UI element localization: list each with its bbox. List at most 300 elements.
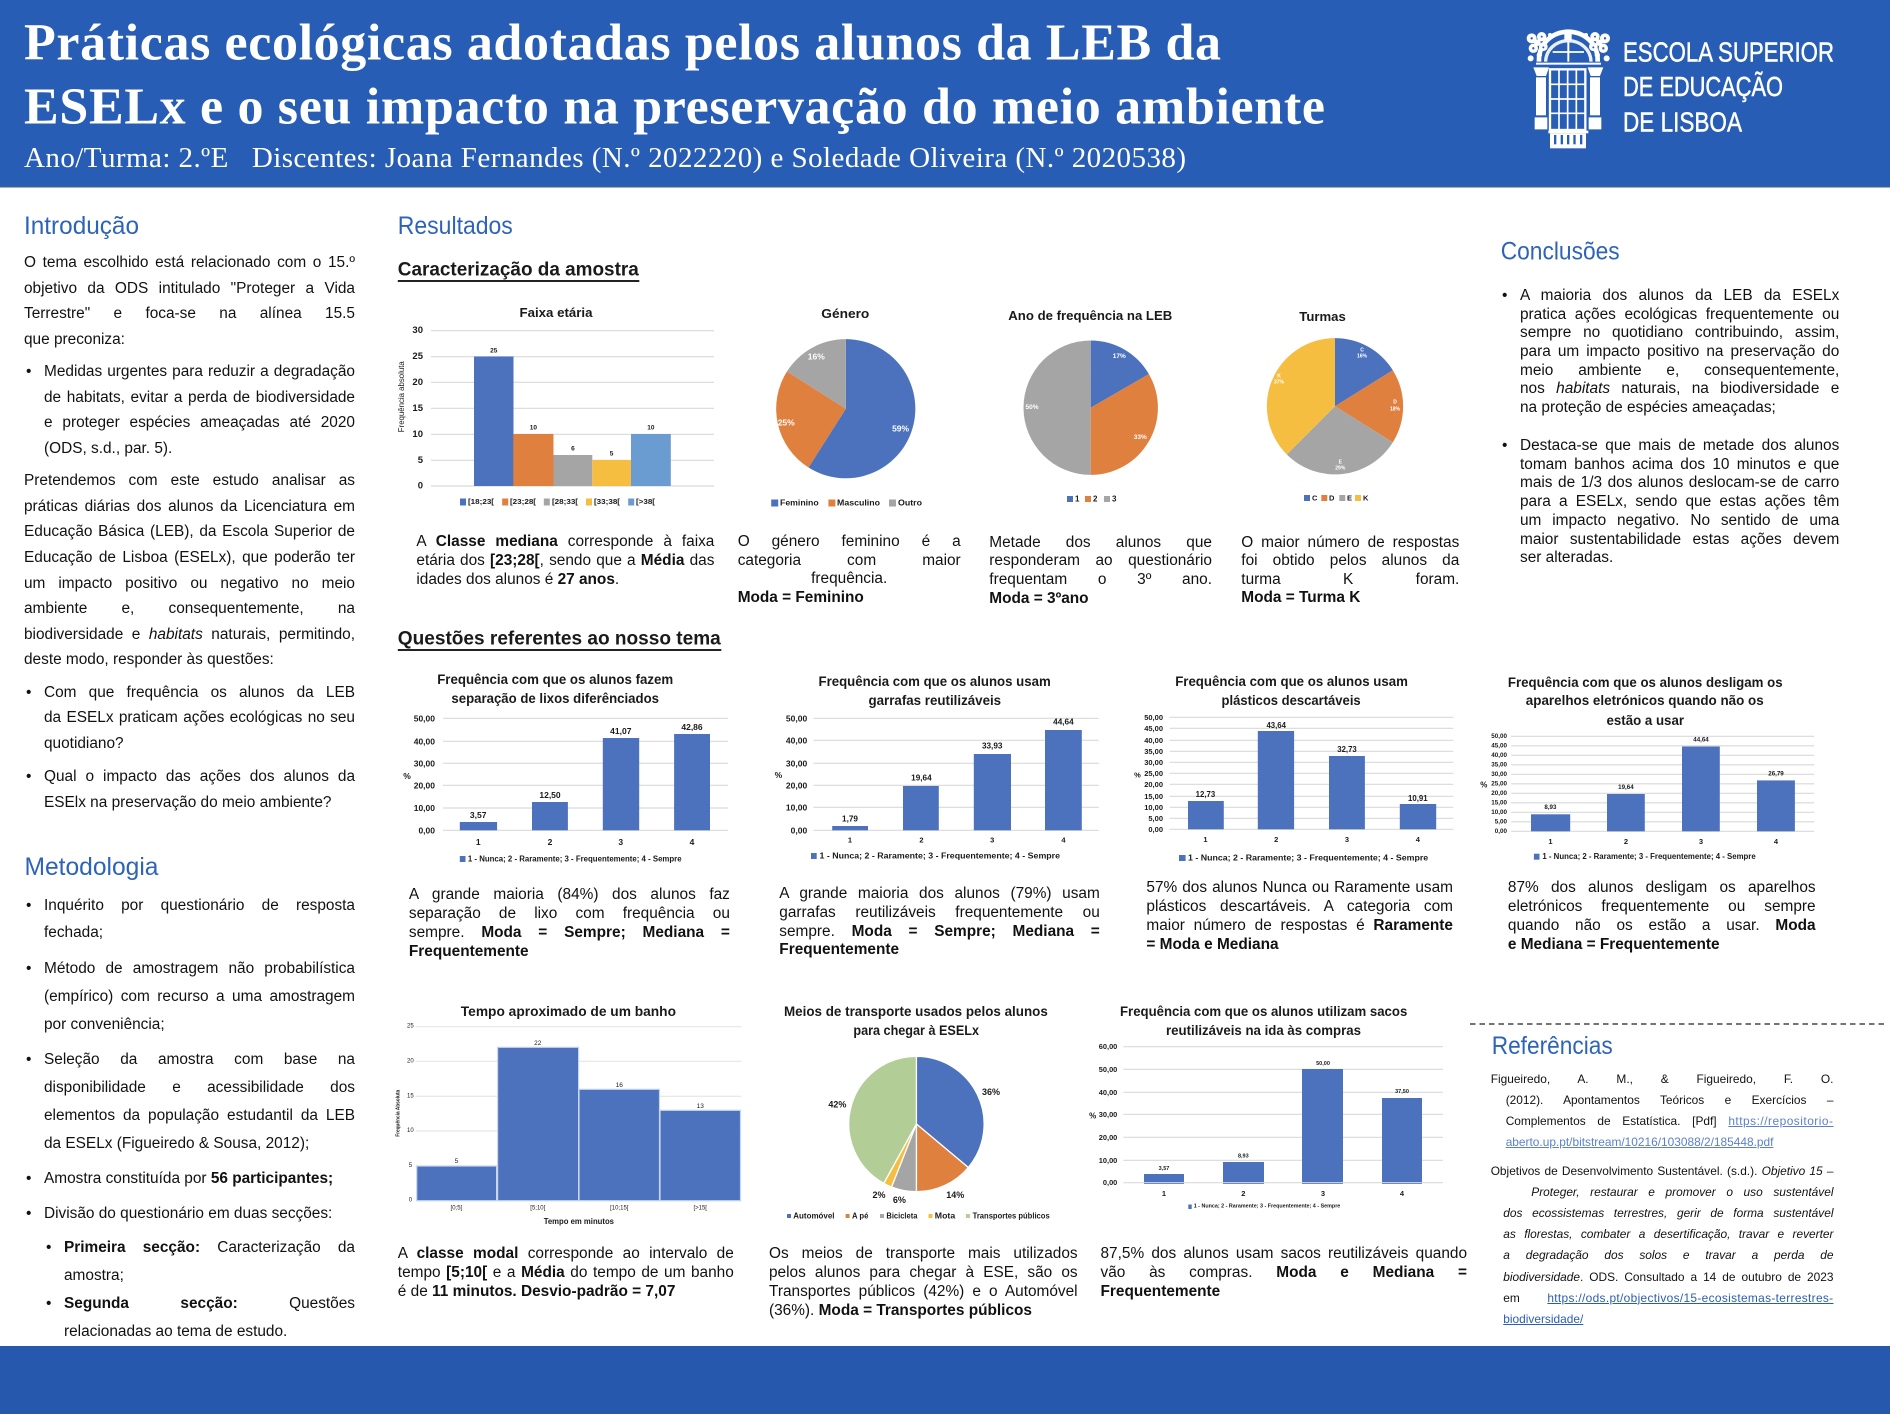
value labels	[1196, 721, 1428, 803]
y axis labels: 10,00	[414, 803, 435, 813]
y axis labels: 20	[412, 377, 423, 388]
text: conclusão 1: na proteção de espécies ameaçadas;	[1520, 399, 1776, 416]
text: metodologia bullet 3: disponibilidade e acessibilidade dos	[44, 1079, 355, 1096]
category labels: [0;5[	[451, 1206, 463, 1212]
text: conclusão 1: pratica ações ecológicas frequentemente ou	[1520, 306, 1839, 322]
y axis labels: 0,00	[791, 825, 807, 835]
y axis labels: 5	[409, 1163, 413, 1169]
text: segunda secção: relacionadas ao tema de estudo.	[64, 1323, 287, 1340]
y axis labels: 0,00	[418, 825, 435, 835]
caption: banho: A classe modal corresponde ao intervalo de	[398, 1245, 734, 1262]
category labels: 3	[618, 837, 623, 847]
legend: 1	[1075, 494, 1080, 504]
text: introdução paragraph 2: ambiente e, consequentemente, na	[24, 600, 355, 617]
caption: aparelhos: eletrónicos frequentemente ou sempre	[1508, 898, 1816, 915]
y axis labels: 0,00	[1495, 828, 1507, 835]
pie: 29%	[1335, 465, 1346, 471]
value labels	[490, 348, 655, 458]
text: metodologia bullet 3	[26, 1051, 355, 1152]
y axis labels: 5,00	[1148, 814, 1163, 823]
caption: Ano de frequência: responderam ao questionário	[989, 552, 1212, 569]
value labels: 44,64	[1053, 718, 1074, 726]
category labels	[1203, 835, 1421, 844]
heading: Metodologia: Metodologia	[24, 853, 159, 881]
y axis labels: 30,00	[1491, 771, 1507, 778]
subheading: Caracterização da amostra: Caracterização da amostra	[398, 260, 639, 280]
text: introdução paragraph 2: Educação Básica (LEB), da Escola Superior de	[24, 523, 355, 540]
chart title: Frequência com que os alunos utilizam sacos	[1120, 1004, 1407, 1019]
category labels: 4	[1416, 835, 1421, 844]
pie: C	[1360, 347, 1364, 353]
text: questão 1	[26, 684, 355, 752]
category labels: 1	[476, 837, 481, 847]
caption: aparelhos: e Mediana = Frequentemente	[1508, 936, 1720, 953]
text: metodologia bullet 1	[26, 896, 355, 941]
legend: Masculino	[837, 498, 880, 508]
text: conclusão 2: mais de 1/3 dos alunos deslocam-se de carro	[1520, 474, 1839, 491]
text: introdução paragraph 2: deste modo, responder às questões:	[24, 651, 274, 668]
legend: E	[1347, 494, 1352, 502]
legend: 3	[1112, 494, 1117, 504]
caption: garrafas: Frequentemente	[779, 941, 899, 958]
legend	[1067, 494, 1117, 504]
category labels: 2	[1241, 1189, 1245, 1198]
y axis title: Frequência absoluta	[396, 361, 406, 432]
value labels: 44,64	[1693, 736, 1709, 744]
y axis labels: 35,00	[1491, 761, 1507, 768]
text: conclusão 1: nos habitats naturais, na biodiversidade e	[1520, 380, 1839, 397]
category labels	[1162, 1189, 1405, 1198]
bars	[417, 1047, 740, 1201]
text: segunda secção	[46, 1295, 355, 1340]
y axis labels: 30,00	[1099, 1110, 1117, 1119]
heading: Referências: Referências	[1492, 1032, 1613, 1060]
reference: ODS	[1491, 1164, 1834, 1326]
text: introdução paragraph 1: Terrestre" e foca-se na alínea 15.5	[24, 305, 355, 322]
text: introdução paragraph 2: um impacto positivo ou negativo no meio	[24, 575, 355, 592]
chart title: plásticos descartáveis	[1222, 693, 1361, 708]
y axis labels: 50,00	[1099, 1065, 1117, 1074]
y axis labels	[1089, 1042, 1117, 1187]
category labels	[476, 837, 695, 847]
chart: separação de lixos	[403, 672, 728, 864]
reference: Figueiredo: Complementos de Estatística. [Pdf] https://repositorio-	[1506, 1114, 1833, 1128]
y axis labels	[407, 1024, 414, 1204]
caption: transporte: pelos alunos para chegar à ESE, são os	[769, 1264, 1078, 1281]
subtitle: Ano/Turma: 2.ºE Discentes: Joana Fernandes (N.º 2022220) e Soledade Oliveira (N.º 2020538)	[24, 142, 1186, 174]
icon: school logo window	[1527, 29, 1610, 148]
legend: [>38[	[636, 499, 656, 506]
legend: C	[1312, 494, 1318, 502]
y axis labels: 25	[412, 351, 424, 362]
value labels: 19,64	[1618, 784, 1634, 791]
chart: Tempo aproximado de um banho	[396, 1004, 741, 1226]
category labels: 4	[1061, 836, 1066, 844]
y axis labels: 60,00	[1099, 1042, 1117, 1051]
text: metodologia bullet 1: Inquérito por questionário de resposta	[44, 896, 355, 914]
caption: plásticos: plásticos descartáveis. A categoria com	[1146, 898, 1453, 915]
legend: 1 - Nunca; 2 - Raramente; 3 - Frequentemente; 4 - Sempre	[468, 854, 682, 864]
text: primeira secção: Primeira secção: Caracterização da	[64, 1239, 355, 1256]
value labels: 10,91	[1408, 794, 1428, 803]
value labels	[455, 1040, 704, 1165]
category labels: 4	[1774, 837, 1779, 846]
caption: Ano de frequência: Metade dos alunos que	[989, 534, 1212, 550]
logo wordmark	[1623, 37, 1834, 138]
heading: Conclusões: Conclusões	[1501, 238, 1620, 266]
value labels: 1,79	[842, 814, 858, 824]
legend: Automóvel	[793, 1212, 834, 1220]
y axis labels: 25	[407, 1024, 414, 1030]
text: introdução bullet meta 15.5: e proteger espécies ameaçadas até 2020	[44, 414, 355, 431]
caption: plásticos: 57% dos alunos Nunca ou Raramente usam	[1146, 879, 1453, 896]
text: questão 2: ESElx na preservação do meio ambiente?	[44, 794, 331, 810]
caption: garrafas: A grande maioria dos alunos (79%) usam	[779, 885, 1100, 902]
heading: Resultados: Resultados	[398, 212, 513, 240]
pie: E	[1339, 459, 1343, 465]
category labels: 2	[1624, 837, 1628, 846]
chart title: Frequência com que os alunos usam	[1175, 674, 1408, 689]
y axis labels: 10,00	[1144, 803, 1163, 812]
value labels: 26,79	[1768, 770, 1784, 778]
text: introdução paragraph 1: O tema escolhido está relacionado com o 15.º	[24, 254, 355, 271]
y axis labels: 40,00	[1099, 1088, 1117, 1097]
chart title: aparelhos eletrónicos quando não os	[1526, 693, 1764, 708]
text: •	[1502, 437, 1507, 454]
pie	[1267, 338, 1403, 474]
category labels: [5;10[	[530, 1206, 546, 1212]
value labels: 6	[571, 446, 575, 452]
chart title: Meios de transporte usados pelos alunos	[784, 1004, 1048, 1019]
caption: Turmas: O maior número de respostas	[1241, 534, 1459, 551]
caption: separação de lixos: A grande maioria (84%) dos alunos faz	[409, 886, 730, 903]
text: conclusão 1	[1502, 287, 1840, 416]
reference: Figueiredo	[1491, 1072, 1834, 1149]
pie: 16%	[808, 351, 825, 361]
pie	[776, 339, 915, 478]
title	[24, 14, 1325, 136]
reference: Figueiredo: Figueiredo, A. M., & Figueiredo, F. O.	[1491, 1072, 1833, 1086]
text: •	[46, 1295, 51, 1312]
reference: ODS: dos ecossistemas terrestres, gerir de forma sustentável	[1503, 1206, 1833, 1220]
chart: Faixa etária	[396, 305, 714, 506]
chart title	[784, 1004, 1048, 1038]
y axis labels: 30,00	[414, 758, 435, 768]
text: metodologia bullet 2: Método de amostragem não probabilística	[44, 960, 355, 977]
bars	[474, 356, 671, 486]
category labels: 4	[690, 837, 695, 847]
reference: ODS: biodiversidade/	[1503, 1312, 1583, 1326]
text: conclusão 2	[1502, 437, 1840, 566]
y axis labels: 10,00	[1099, 1156, 1117, 1165]
y axis labels: 15	[407, 1093, 414, 1099]
y axis labels: 5,00	[1495, 818, 1507, 825]
y axis labels: 20,00	[1491, 790, 1507, 797]
caption: Faixa etária: etária dos [23;28[, sendo que a Média das	[416, 552, 714, 569]
text: •	[26, 1051, 31, 1068]
caption: banho: é de 11 minutos. Desvio-padrão = 7,07	[398, 1283, 675, 1300]
y axis labels	[1134, 713, 1163, 834]
text: introdução paragraph 1: que preconiza:	[24, 331, 125, 348]
value labels: 8,93	[1238, 1154, 1249, 1160]
value labels: 42%	[828, 1100, 846, 1110]
caption: Faixa etária: idades dos alunos é 27 anos.	[416, 571, 619, 588]
legend	[771, 498, 922, 508]
y axis labels: 15	[412, 403, 424, 414]
text: metodologia bullet 3: Seleção da amostra com base na	[44, 1051, 355, 1068]
y axis labels	[412, 325, 424, 492]
category labels: 1	[1162, 1189, 1166, 1198]
y axis labels: 20,00	[786, 780, 807, 790]
pie: 59%	[892, 423, 910, 433]
text: introdução bullet meta 15.5	[26, 363, 355, 457]
text: introdução paragraph 2: práticas diárias dos alunos da Licenciatura em	[24, 498, 355, 515]
caption: Género: categoria com maior	[738, 552, 961, 569]
caption: banho: tempo [5;10[ e a Média do tempo de um banho	[398, 1264, 734, 1281]
text: conclusão 2: para a ESELx, sendo que estas ações têm	[1520, 493, 1839, 510]
pie: D	[1393, 400, 1397, 406]
logo wordmark: DE LISBOA	[1623, 107, 1742, 138]
legend: 1 - Nunca; 2 - Raramente; 3 - Frequentemente; 4 - Sempre	[1188, 854, 1429, 862]
value labels: 6%	[893, 1195, 906, 1205]
y axis labels: 30,00	[786, 758, 807, 768]
chart: Meios de transporte	[784, 1004, 1050, 1220]
value labels: 5	[455, 1158, 459, 1165]
chart: aparelhos eletrónicos	[1480, 675, 1814, 861]
reference: Figueiredo: (2012). Apontamentos Teóricos e Exercícios –	[1506, 1093, 1833, 1107]
reference: Figueiredo: aberto.up.pt/bitstream/10216/103088/2/185448.pdf	[1506, 1135, 1773, 1149]
heading: Introdução: Introdução	[24, 212, 139, 240]
reference: ODS: biodiversidade. ODS. Consultado a 14 de outubro de 2023	[1503, 1270, 1833, 1284]
legend: [23;28[	[510, 499, 537, 506]
category labels: 1	[848, 836, 852, 844]
legend: Outro	[898, 498, 922, 508]
category labels: 3	[990, 836, 994, 844]
legend: K	[1363, 494, 1369, 502]
caption: Faixa etária	[416, 533, 714, 588]
pie: 17%	[1113, 353, 1126, 360]
caption: aparelhos: quando não os estão a usar. Moda	[1508, 917, 1816, 934]
chart title: Tempo aproximado de um banho	[461, 1004, 676, 1019]
text: questão 1: quotidiano?	[44, 735, 124, 752]
caption: sacos: Frequentemente	[1100, 1283, 1220, 1300]
y axis labels: 15,00	[1491, 799, 1507, 806]
text: metodologia bullet 4: Amostra constituída por 56 participantes;	[44, 1170, 333, 1187]
footer band	[0, 1346, 1890, 1414]
category labels	[451, 1206, 707, 1212]
caption: Ano de frequência: frequentam o 3º ano.	[989, 571, 1212, 588]
caption: separação de lixos: separação de lixo com frequência ou	[409, 905, 730, 922]
value labels: 42,86	[681, 722, 703, 732]
caption: separação de lixos	[409, 886, 730, 960]
legend: Bicicleta	[886, 1212, 918, 1220]
y axis labels: 20	[407, 1058, 414, 1064]
value labels: 14%	[946, 1190, 964, 1200]
y axis labels: 35,00	[1144, 747, 1163, 756]
category labels: 3	[1699, 837, 1703, 846]
category labels: 1	[1203, 835, 1207, 844]
chart title	[1120, 1004, 1407, 1038]
y axis labels: 40,00	[1144, 736, 1163, 745]
caption: Turmas	[1241, 534, 1460, 606]
value labels: 12,73	[1196, 790, 1216, 799]
chart title: Frequência com que os alunos desligam os	[1508, 675, 1783, 690]
text: conclusão 1: A maioria dos alunos da LEB da ESELx	[1520, 287, 1839, 304]
value labels: 5	[610, 450, 614, 458]
value labels: 3,57	[470, 810, 487, 820]
subheading: Questões referentes ao nosso tema: Questões referentes ao nosso tema	[398, 628, 721, 650]
category labels	[848, 836, 1066, 844]
legend: Mota	[935, 1212, 956, 1220]
value labels	[842, 718, 1074, 824]
legend: Feminino	[780, 498, 819, 508]
y axis labels: 0	[409, 1198, 413, 1204]
bars	[1531, 746, 1795, 831]
text: •	[26, 684, 31, 701]
y axis labels: 50,00	[414, 713, 435, 723]
bars	[1144, 1069, 1422, 1184]
y axis labels: 5	[418, 455, 424, 466]
chart title: para chegar à ESELx	[853, 1023, 979, 1038]
y axis labels: 20,00	[1144, 780, 1163, 789]
text: •	[26, 896, 31, 914]
chart: plásticos descartáveis	[1134, 674, 1453, 862]
text: metodologia bullet 5: Divisão do questionário em duas secções:	[44, 1205, 332, 1222]
y axis labels: %	[775, 770, 783, 780]
text: conclusão 2: um impacto negativo. No sentido de uma	[1520, 512, 1839, 529]
category labels: [>15[	[693, 1206, 707, 1212]
caption: separação de lixos: Frequentemente	[409, 943, 529, 960]
category labels: 2	[1274, 835, 1278, 844]
value labels: 36%	[982, 1087, 1000, 1097]
y axis labels: 30	[412, 325, 423, 336]
caption: sacos: 87,5% dos alunos usam sacos reutilizáveis quando	[1100, 1245, 1467, 1262]
y axis labels: 45,00	[1491, 742, 1507, 749]
category labels: 3	[1321, 1189, 1325, 1198]
value labels: 41,07	[610, 726, 632, 736]
legend: [33;38[	[594, 499, 621, 506]
value labels: 50,00	[1316, 1061, 1330, 1067]
y axis labels: 40,00	[414, 736, 435, 746]
value labels: 33,93	[982, 742, 1003, 750]
caption: aparelhos	[1508, 879, 1816, 953]
value labels: 37,50	[1395, 1089, 1409, 1095]
value labels: 13	[697, 1103, 704, 1110]
text: questão 2	[26, 768, 356, 810]
caption: Género: O género feminino é a	[738, 533, 961, 550]
value labels: 25	[490, 348, 498, 354]
text: introdução paragraph 2: biodiversidade e habitats naturais, permitindo,	[24, 626, 355, 643]
caption: garrafas: sempre. Moda = Sempre; Mediana =	[779, 922, 1100, 940]
legend: A pé	[852, 1212, 869, 1220]
y axis labels: 10,00	[786, 802, 807, 812]
legend	[1304, 494, 1369, 502]
x axis title: Tempo em minutos	[544, 1217, 615, 1226]
y axis labels	[775, 713, 807, 835]
y axis labels: 20,00	[414, 780, 435, 790]
bars	[1188, 731, 1436, 829]
category labels: 4	[1400, 1189, 1405, 1198]
caption: separação de lixos: sempre. Moda = Sempre; Mediana =	[409, 924, 730, 941]
chart title: Faixa etária	[520, 305, 593, 320]
chart title: Frequência com que os alunos usam	[818, 674, 1051, 689]
caption: Turmas: foi obtido pelos alunos da	[1241, 552, 1459, 569]
pie	[849, 1056, 984, 1192]
pie: 16%	[1357, 353, 1368, 359]
category labels: 2	[919, 836, 923, 844]
chart title: garrafas reutilizáveis	[868, 693, 1001, 708]
pie: 25%	[778, 417, 795, 427]
chart title	[437, 672, 673, 706]
text: metodologia bullet 2: (empírico) com recurso a uma amostragem	[44, 988, 355, 1005]
caption: Faixa etária: A Classe mediana corresponde à faixa	[416, 533, 714, 550]
text: questão 1: da ESELx praticam ações ecológicas no seu	[44, 709, 355, 726]
text: metodologia bullet 2	[26, 960, 355, 1033]
reference: ODS: em https://ods.pt/objectivos/15-ecosistemas-terrestres-	[1503, 1291, 1833, 1305]
caption: Género	[738, 533, 961, 606]
y axis labels: 10	[412, 429, 423, 440]
y axis labels: 20,00	[1099, 1133, 1117, 1142]
value labels: 8,93	[1544, 804, 1557, 811]
value labels: 22	[534, 1040, 542, 1047]
text: •	[26, 1205, 31, 1222]
pie: 18%	[1390, 406, 1401, 412]
title: ESELx e o seu impacto na preservação do meio ambiente	[24, 78, 1325, 136]
text: metodologia bullet 1: fechada;	[44, 924, 103, 941]
text: conclusão 2: tomam banhos acima dos 10 minutos e que	[1520, 456, 1839, 473]
y axis labels: 10,00	[1491, 809, 1507, 816]
pie: 33%	[1134, 434, 1147, 441]
chart title	[1508, 675, 1783, 728]
reference: ODS: a degradação dos solos e travar a perda de	[1503, 1248, 1833, 1262]
y axis labels: 0	[418, 480, 423, 492]
text: conclusão 1: sempre no quotidiano contribuindo, assim,	[1520, 324, 1839, 341]
text: introdução paragraph 1: objetivo da ODS intitulado "Proteger a Vida	[24, 280, 355, 297]
legend: 1 - Nunca; 2 - Raramente; 3 - Frequentemente; 4 - Sempre	[1194, 1204, 1340, 1210]
category labels: 3	[1345, 835, 1349, 844]
text: introdução paragraph 2: Pretendemos com este estudo analisar as	[24, 472, 355, 489]
y axis labels: 45,00	[1144, 724, 1163, 733]
header band	[0, 0, 1890, 188]
y axis labels: 40,00	[1491, 752, 1507, 759]
y axis labels: 25,00	[1144, 769, 1163, 778]
caption: transporte	[769, 1245, 1078, 1319]
text: conclusão 2: maior sustentabilidade estas ações devem	[1520, 531, 1839, 548]
chart: Ano de frequência na LEB	[1008, 308, 1172, 504]
text: conclusão 1: para um impacto positivo na preservação do	[1520, 343, 1839, 360]
text: introdução bullet meta 15.5: (ODS, s.d., par. 5).	[44, 440, 172, 457]
category labels: [10;15[	[610, 1206, 629, 1212]
legend: [28;33[	[552, 499, 579, 506]
legend: 1 - Nunca; 2 - Raramente; 3 - Frequentemente; 4 - Sempre	[1542, 852, 1756, 861]
caption: sacos: vão às compras. Moda e Mediana =	[1100, 1264, 1467, 1281]
logo wordmark: ESCOLA SUPERIOR	[1623, 37, 1834, 68]
pie: 37%	[1274, 379, 1285, 385]
value labels: 3,57	[1159, 1166, 1169, 1172]
caption: Género: frequência.	[811, 570, 887, 587]
text: conclusão 2: Destaca-se que mais de metade dos alunos	[1520, 437, 1839, 454]
caption: transporte: (36%). Moda = Transportes públicos	[769, 1302, 1032, 1319]
y axis labels: 0,00	[1103, 1178, 1117, 1187]
y axis title: Frequência Absoluta	[396, 1090, 402, 1137]
chart title: Frequência com que os alunos fazem	[437, 672, 673, 687]
value labels: 12,50	[539, 790, 561, 800]
value labels: 19,64	[911, 774, 932, 782]
y axis labels: 50,00	[1491, 733, 1507, 740]
legend	[460, 498, 656, 506]
pie: K	[1277, 373, 1281, 379]
value labels: 16	[616, 1082, 623, 1089]
